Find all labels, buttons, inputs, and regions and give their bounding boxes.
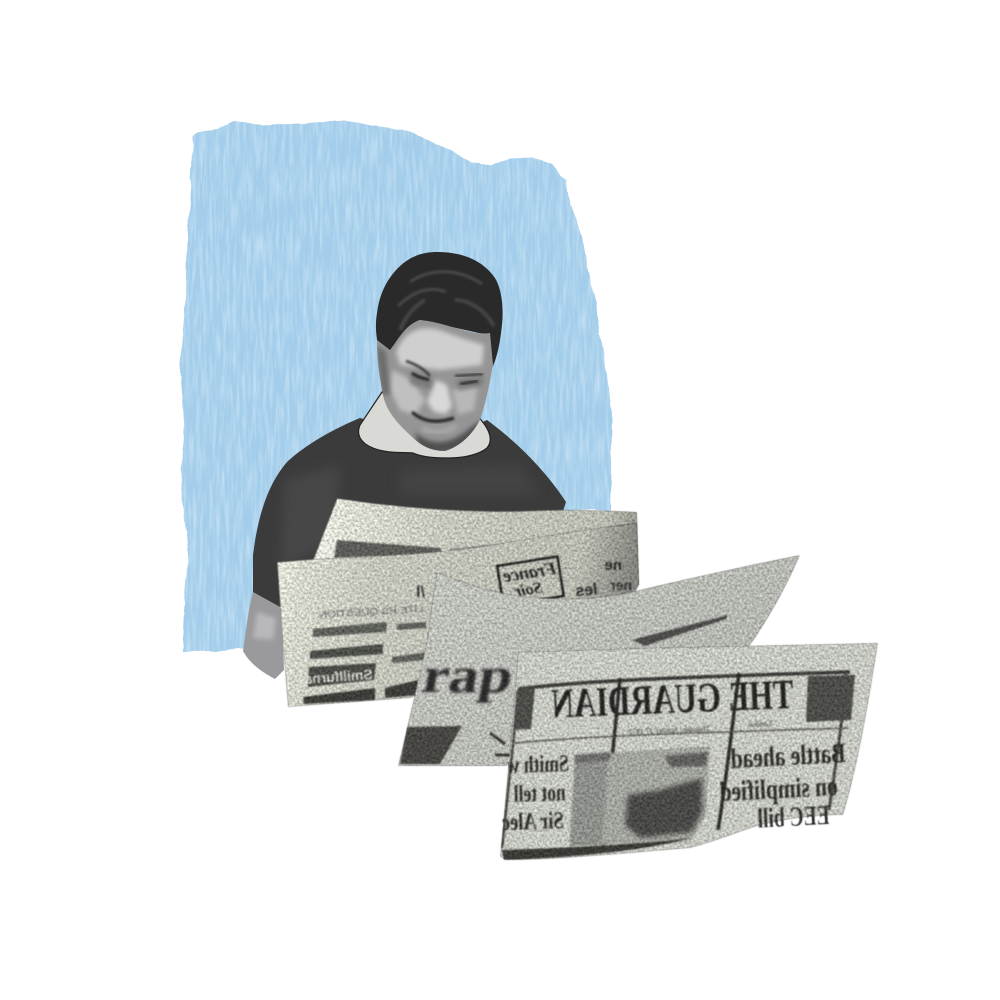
title: THE GUARDIAN mirrored: THE GUARDIAN	[551, 672, 794, 728]
newspaper: The Guardian front page: EEC bill	[757, 800, 830, 835]
ear boxes	[806, 675, 855, 722]
masthead rule and column rules	[518, 672, 850, 689]
newspaper: The Guardian front page: on simplified	[719, 771, 838, 808]
ad rows	[313, 622, 387, 637]
mirrored fragment: rap: rap	[418, 647, 518, 703]
newspaper: The Guardian front page: Sir Alec	[501, 808, 564, 836]
newspaper: back sheet	[313, 498, 639, 590]
newspaper: front sheet: LITE ES QUESTION	[319, 604, 424, 619]
newspaper: The Guardian front page	[500, 643, 878, 860]
masthead box France Soir: France	[501, 558, 559, 586]
panel: torn blue paper background	[180, 120, 612, 651]
dark crease	[632, 615, 728, 646]
figure: woman reading	[243, 252, 566, 679]
newspaper: front sheet: les	[574, 581, 598, 600]
newspaper: front sheet: /I	[416, 584, 425, 601]
left column headline: Smith w	[506, 751, 569, 779]
newspaper: middle curled sheet	[398, 555, 800, 766]
newspaper: The Guardian front page: London	[748, 719, 772, 729]
newspaper: front sheet	[277, 523, 639, 707]
hair	[376, 252, 503, 372]
collar	[359, 392, 490, 458]
news photo	[502, 746, 710, 860]
small dateline: Thursday, January 27 1972	[628, 724, 710, 736]
masthead box France Soir	[497, 556, 564, 606]
sweater	[253, 418, 566, 612]
mirrored headline fragments: ne	[604, 557, 622, 574]
face	[377, 320, 493, 451]
dark photo	[400, 726, 462, 764]
arm	[243, 592, 284, 679]
right column headline: Battle ahead	[730, 738, 846, 775]
newspaper: front sheet: Smillfurna	[304, 666, 373, 687]
masthead box France Soir: Soir	[513, 579, 543, 601]
newspaper: The Guardian front page: not tell	[513, 780, 566, 808]
newspaper: front sheet: ner	[610, 577, 632, 593]
